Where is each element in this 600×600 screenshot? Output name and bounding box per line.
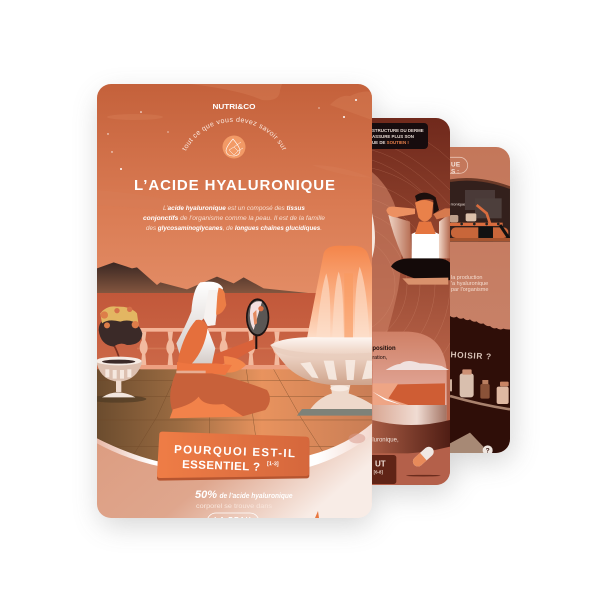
hair <box>176 282 223 357</box>
face <box>215 288 226 315</box>
plant shadow <box>97 396 146 403</box>
illustration: woman with mirror <box>170 282 270 418</box>
white top <box>192 328 215 363</box>
text lines: ration, <box>372 355 387 361</box>
callout: soutien: STRUCTURE DU DERME <box>372 128 424 133</box>
balustrade <box>139 328 309 370</box>
product box <box>450 433 483 453</box>
button label <box>174 444 295 474</box>
sea <box>97 293 316 370</box>
title: L’ACIDE HYALURONIQUE <box>134 177 335 194</box>
neck and head <box>415 222 436 234</box>
button <box>372 455 396 484</box>
sky <box>97 84 372 299</box>
mountains <box>97 262 312 293</box>
heading: HOISIR ? <box>450 349 492 361</box>
back card text: par l'organisme <box>451 287 488 293</box>
button: pourquoi <box>157 432 309 481</box>
button: UT <box>375 460 386 469</box>
floor <box>97 369 372 462</box>
far arm <box>209 339 255 365</box>
white disc edge <box>372 213 375 258</box>
bottles <box>450 369 509 404</box>
intro text: conjonctifs de l’organisme comme la peau. Il est de la famille <box>143 215 325 222</box>
text lines <box>372 346 399 444</box>
stat: 50 percent: corporel se trouve dans <box>196 503 273 510</box>
logo: NUTRI&CO <box>212 102 256 111</box>
illustration: dome landscape <box>372 332 450 485</box>
stars <box>107 99 357 170</box>
stat: 50 percent <box>195 489 292 510</box>
legs <box>391 258 452 282</box>
card shadows <box>100 95 512 525</box>
ripple lines <box>372 142 450 371</box>
button label: [1-3] <box>267 461 279 467</box>
back card text: la production <box>451 275 482 281</box>
stat: 50 percent: 50% <box>195 489 217 501</box>
back card heading pill <box>450 156 468 174</box>
illustration: seated woman <box>386 193 452 285</box>
callout: soutien: ASSURE PLUS SON <box>372 134 414 139</box>
callout: soutien: UE DE SOUTIEN ! <box>372 140 409 145</box>
front hair lock <box>204 290 218 326</box>
mirror <box>255 335 257 349</box>
pink disc behind figure <box>372 172 402 365</box>
help badge: ? <box>486 448 490 455</box>
text lines: luronique, <box>372 438 399 444</box>
callout: soutien <box>372 123 428 149</box>
panel: front card <box>97 84 372 518</box>
illustration: potted rose bush <box>96 306 142 397</box>
back card text <box>451 275 488 293</box>
panel: middle card <box>372 118 450 485</box>
intro text: L’acide hyaluronique est un composé des tissus <box>163 205 305 212</box>
stat: 50 percent: de l’acide hyaluronique <box>220 491 292 500</box>
skirt <box>170 373 270 416</box>
icon: molecule drop <box>222 136 246 158</box>
intro text: des glycosaminoglycanes, de longues chaînes glucidiques. <box>146 225 322 232</box>
text lines: position <box>372 346 396 352</box>
illustration: curved lower panel <box>97 423 372 518</box>
button label: ESSENTIEL ? <box>182 459 260 474</box>
intro text <box>143 205 325 232</box>
button: [6-8] <box>374 469 383 474</box>
back card heading pill: UE <box>451 162 460 169</box>
button label: POURQUOI EST-IL <box>174 444 295 460</box>
panel: back card <box>450 147 510 453</box>
panel: dark section <box>450 316 513 455</box>
clouds <box>108 84 372 120</box>
belly and hand <box>224 356 246 373</box>
capsule <box>412 446 434 466</box>
torso <box>412 230 439 259</box>
back card text: 'a hyaluronique <box>451 281 488 287</box>
foot <box>170 397 244 418</box>
torso <box>176 320 214 373</box>
illustration: terrace scene <box>97 246 372 462</box>
illustration: factory conveyor <box>450 179 510 242</box>
pill: la peau <box>207 513 259 531</box>
illustration: factory conveyor: rronique <box>451 201 466 206</box>
robe and arms <box>388 215 412 258</box>
back card heading pill: S : <box>451 168 459 175</box>
arc heading: tout ce que vous devez savoir sur <box>182 116 286 150</box>
illustration: fountain <box>270 246 375 416</box>
pill: la peau: LA PEAU <box>214 517 252 524</box>
